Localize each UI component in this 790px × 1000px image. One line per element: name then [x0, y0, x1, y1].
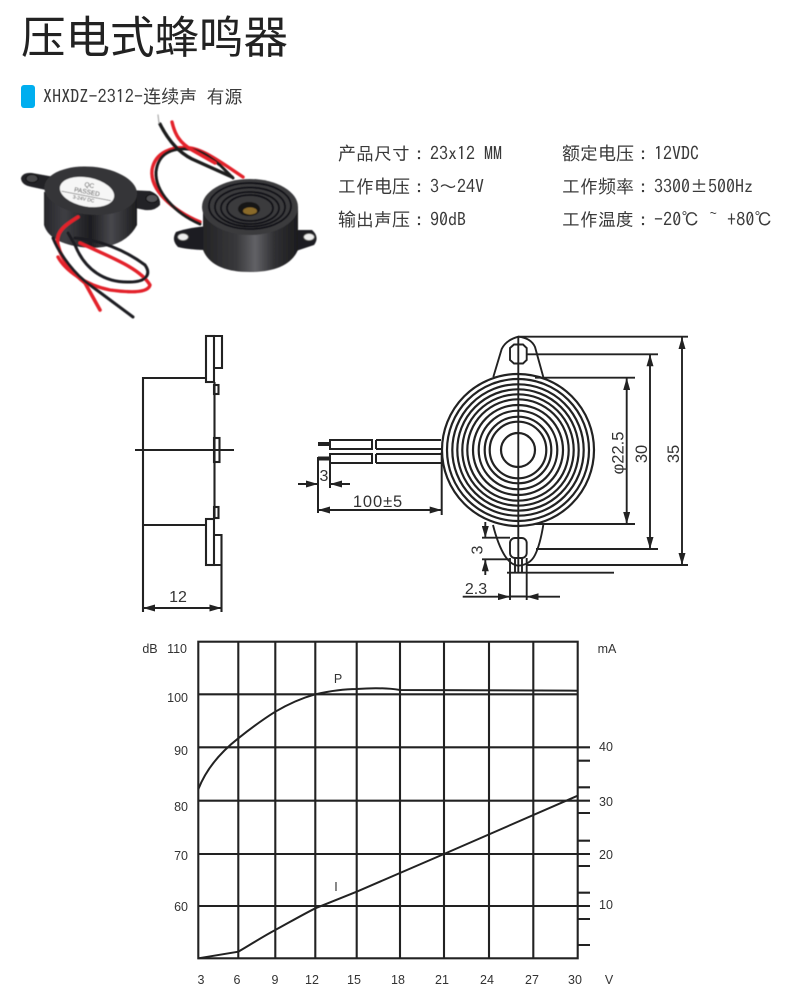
spec: sound pressure [338, 210, 466, 229]
lugs: rear buzzer [174, 226, 210, 250]
product photo: buzzer in front, with QC label [21, 163, 160, 317]
chart labels: 9 [272, 973, 279, 987]
chart labels: 21 [435, 973, 449, 987]
body: front buzzer [44, 192, 137, 248]
wires: rear buzzer [152, 115, 243, 224]
text: -20℃ ~ +80℃ [654, 211, 773, 229]
dimension: 30: 30 [633, 445, 651, 463]
text: 3300±500Hz [654, 178, 753, 196]
spec: frequency: 工作频率： [562, 178, 652, 196]
performance chart [142, 642, 617, 987]
product photo: buzzer behind, with ring face [152, 115, 317, 272]
chart labels: 27 [525, 973, 539, 987]
spec: working voltage [338, 178, 484, 196]
spec: temperature [562, 211, 773, 229]
dimension: 35: 35 [665, 445, 683, 463]
chart grid [198, 642, 590, 958]
dimension: 3 vertical: 3 [470, 545, 486, 554]
chart labels: 30 [599, 795, 613, 809]
chart labels: 18 [391, 973, 405, 987]
title: 压电式蜂鸣器 [21, 1, 288, 66]
chart labels: 3 [198, 973, 205, 987]
spec: rated voltage [562, 144, 699, 163]
spec: rated voltage: 额定电压： [562, 145, 652, 163]
chart labels: 70 [174, 849, 188, 863]
concentric rings [442, 374, 594, 526]
chart labels: 15 [347, 973, 361, 987]
dimension: 12: 12 [169, 589, 187, 606]
text: 23x12 MM [430, 145, 502, 163]
chart labels: dB [142, 642, 158, 656]
chart labels: 24 [480, 973, 494, 987]
text: 3～24V [430, 178, 484, 196]
dimension: 100±5: 100±5 [353, 493, 403, 511]
chart labels: 10 [599, 898, 613, 912]
text: 90dB [430, 211, 466, 229]
dimension: phi 22.5: φ22.5 [610, 432, 628, 474]
blue marker [21, 85, 35, 108]
wires: front buzzer [53, 217, 150, 317]
chart labels: 6 [234, 973, 241, 987]
spec: temperature: 工作温度： [562, 211, 652, 229]
dimension: 3: 3 [320, 468, 329, 485]
dimension: 2.3: 2.3 [465, 581, 487, 598]
text: 12VDC [654, 145, 699, 163]
chart labels: 20 [599, 848, 613, 862]
spec: size [338, 144, 502, 163]
model subtitle: XHXDZ-2312-连续声 有源 [43, 88, 243, 106]
curve P [198, 688, 578, 789]
chart labels: 110 [167, 642, 187, 656]
lead wires drawing [298, 440, 442, 515]
spec: frequency [562, 178, 753, 196]
spec: sound pressure: 输出声压： [338, 211, 428, 229]
label: QC passed: QC [84, 181, 95, 190]
chart labels: mA [598, 642, 617, 656]
front view drawing [442, 337, 688, 600]
chart labels: 60 [174, 900, 188, 914]
spec: working voltage: 工作电压： [338, 178, 428, 196]
side view drawing [135, 336, 234, 612]
chart labels: P [334, 672, 342, 686]
chart labels: 30 [568, 973, 582, 987]
label: QC passed: 3-24V DC [72, 194, 95, 205]
chart labels: I [334, 880, 338, 894]
curve I [198, 796, 578, 958]
chart labels: 90 [174, 744, 188, 758]
lugs: front buzzer [21, 173, 60, 193]
chart labels: 12 [305, 973, 319, 987]
chart labels: 100 [167, 691, 188, 705]
label: QC passed: PASSED [74, 187, 101, 198]
chart labels: 40 [599, 740, 613, 754]
chart labels: 80 [174, 800, 188, 814]
chart labels: V [605, 973, 614, 987]
spec: size: 产品尺寸： [338, 145, 428, 163]
chart labels [142, 642, 617, 987]
label: QC passed [57, 173, 117, 211]
body: rear buzzer [203, 207, 298, 272]
